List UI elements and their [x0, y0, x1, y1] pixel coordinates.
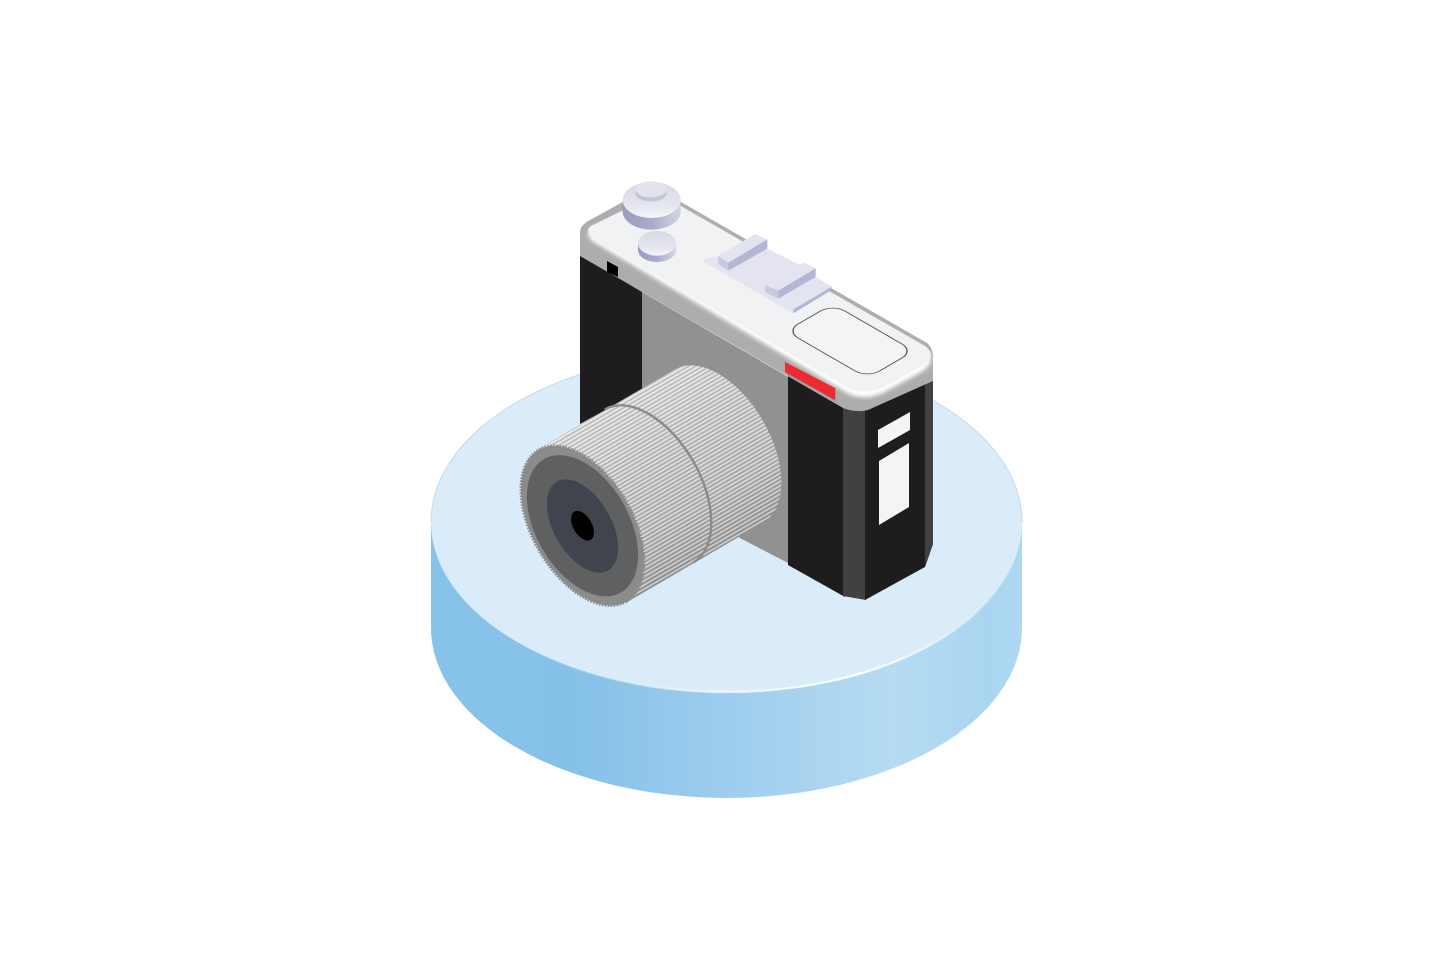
lens barrel groove — [605, 405, 711, 563]
viewfinder window — [607, 261, 618, 277]
right face — [865, 376, 933, 600]
front black block — [788, 376, 845, 597]
platform disc — [431, 352, 1022, 798]
camera front face — [600, 292, 790, 564]
right edge strip — [925, 376, 933, 567]
lens glass — [532, 467, 633, 585]
white label large — [879, 443, 909, 525]
disc upper outline — [431, 352, 1022, 522]
shoe rail front — [765, 263, 816, 291]
red badge — [784, 361, 836, 402]
lens pupil — [566, 507, 599, 544]
white label small — [878, 412, 910, 448]
top display panel — [786, 304, 914, 378]
large dial — [623, 181, 681, 230]
hot shoe — [704, 234, 832, 313]
top plate bevel — [580, 186, 933, 411]
lens barrel — [538, 365, 781, 602]
disc rim highlight — [431, 522, 1022, 692]
disc side wall — [431, 522, 1022, 798]
lens outer ring — [495, 424, 670, 627]
shoe base plate — [704, 259, 793, 313]
shoe rail back — [718, 234, 767, 263]
illustration: isometric camera on a disc — [430, 182, 1022, 798]
top plate — [580, 186, 933, 411]
dials — [623, 181, 681, 262]
corner strip — [843, 406, 866, 600]
top plate surface — [588, 193, 931, 392]
lens dark ring — [504, 436, 661, 616]
lens — [495, 365, 781, 627]
disc top face — [431, 352, 1022, 692]
camera — [495, 181, 933, 627]
small dial — [638, 231, 676, 262]
left black grip — [580, 254, 642, 424]
